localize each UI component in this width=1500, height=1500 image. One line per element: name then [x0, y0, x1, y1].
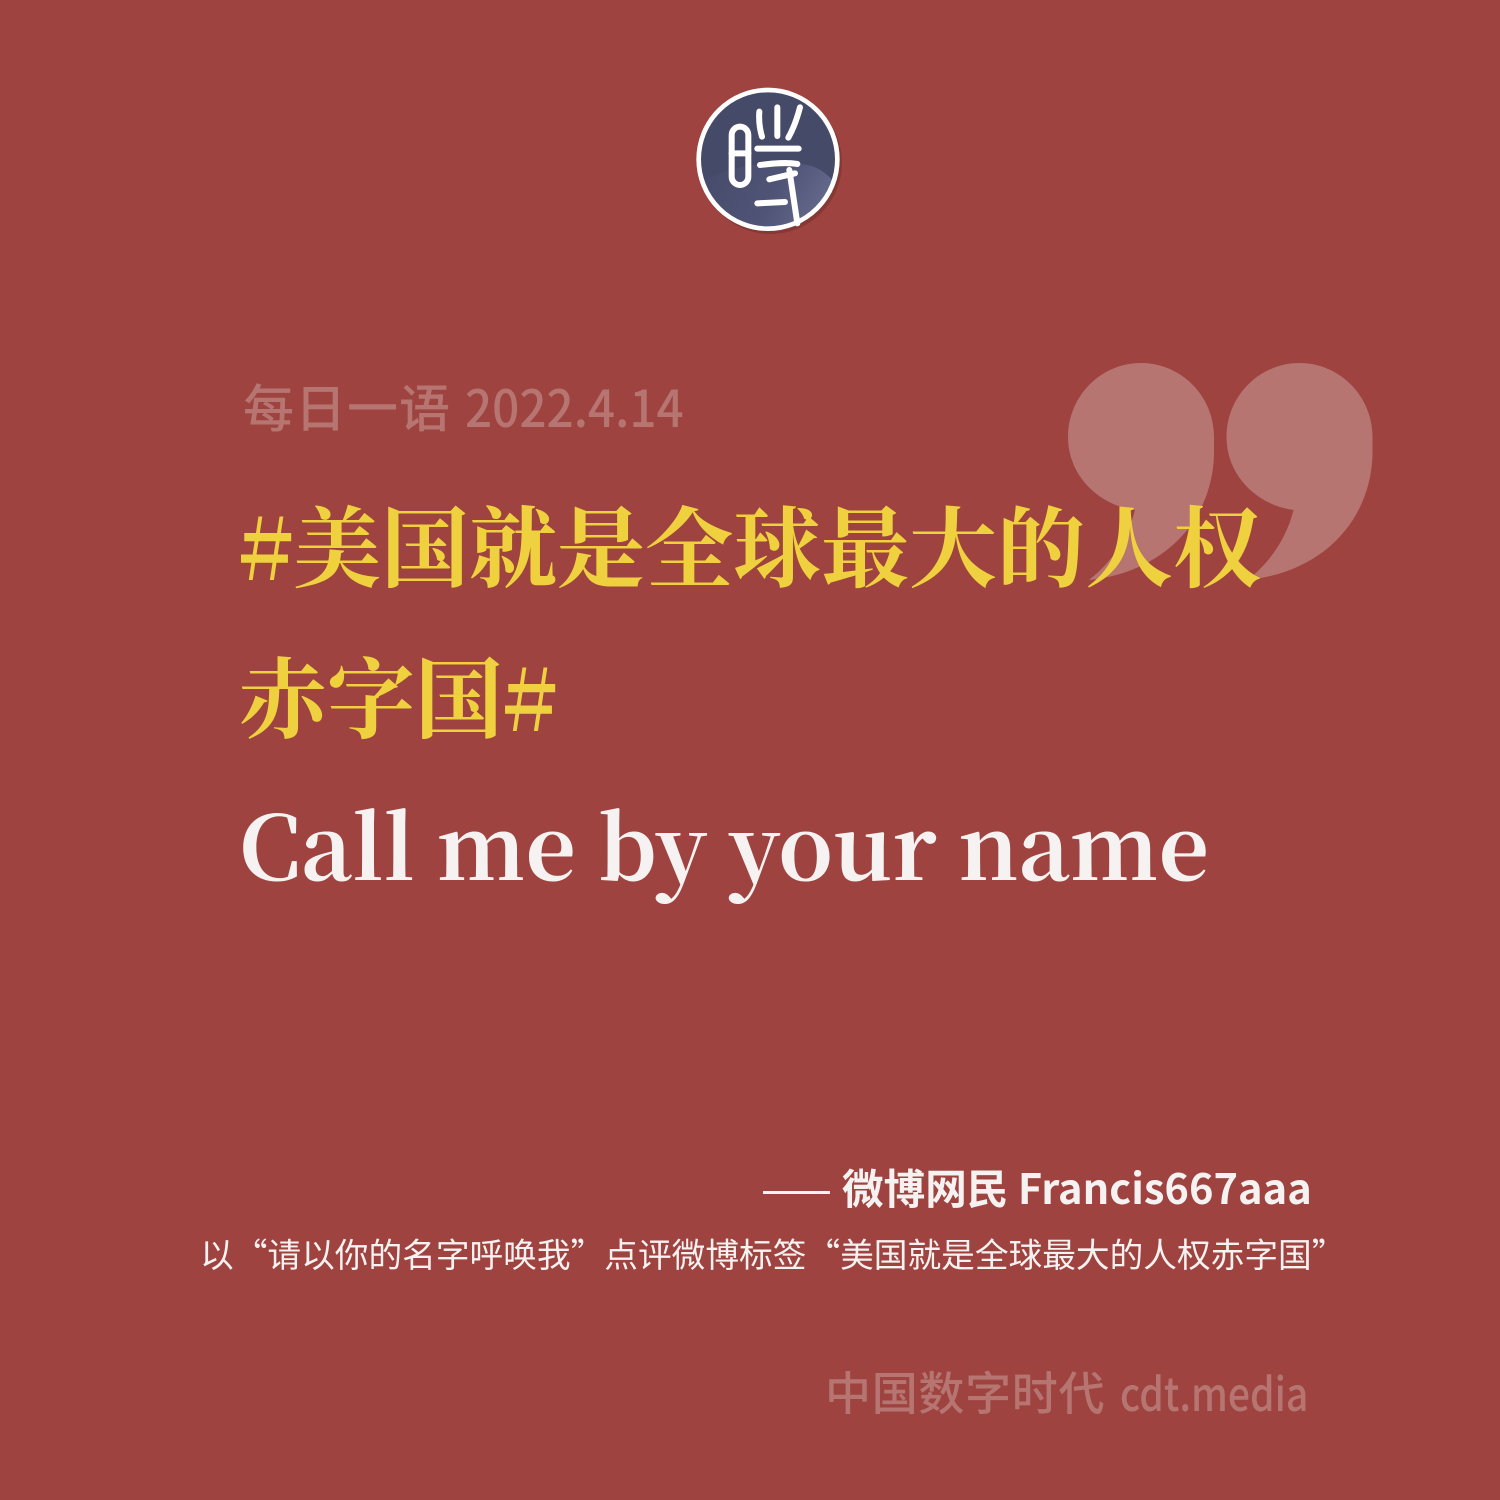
hashtag title line 1: #美国就是全球最大的人权: [239, 480, 1261, 606]
English quote: Call me by your name: [239, 780, 1209, 906]
date heading: [243, 368, 684, 442]
attribution: 微博网民 Francis667aaa: [842, 1156, 1312, 1216]
logo badge: [696, 88, 842, 234]
footer source: cdt.media: [1120, 1359, 1308, 1425]
hashtag title line 2: 赤字国#: [239, 631, 557, 757]
context note: 以“请以你的名字呼唤我”点评微博标签“美国就是全球最大的人权赤字国”: [200, 1228, 1345, 1277]
date heading: 2022.4.14: [465, 368, 684, 442]
date heading: 每日一语: [243, 368, 451, 442]
footer source: 中国数字时代: [825, 1358, 1105, 1424]
footer source: [825, 1358, 1308, 1425]
